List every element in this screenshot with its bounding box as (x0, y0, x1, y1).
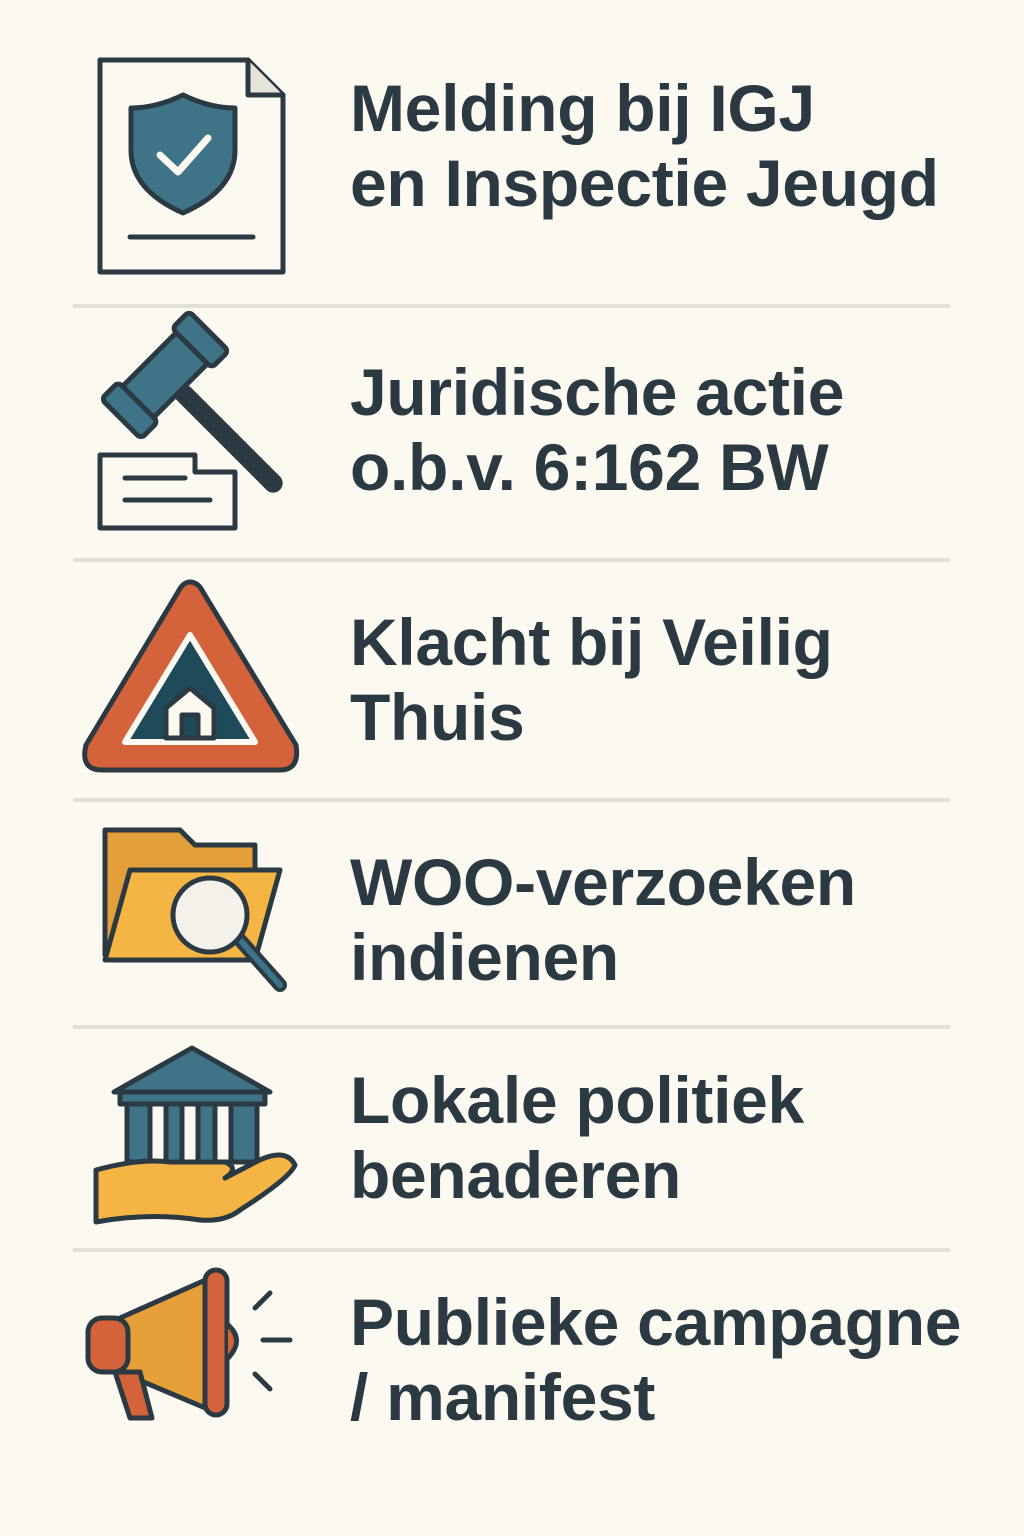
icon: document with shield (100, 60, 283, 272)
icon: megaphone (88, 1270, 290, 1418)
text: klacht: Thuis (350, 680, 524, 754)
text: publieke campagne (350, 1285, 961, 1434)
text: juridische actie (350, 355, 844, 504)
icon: warning triangle with house (85, 582, 297, 770)
text: woo: WOO-verzoeken (350, 845, 856, 919)
text: lokale politiek: benaderen (350, 1138, 681, 1212)
text: woo: indienen (350, 920, 619, 994)
text: melding (350, 71, 939, 220)
text: lokale politiek (350, 1063, 804, 1212)
text: publieke campagne: Publieke campagne (350, 1285, 961, 1359)
text: publieke campagne: / manifest (350, 1360, 655, 1434)
icon: gavel (100, 311, 322, 532)
icon: folder with magnifier (105, 830, 280, 985)
text: melding: Melding bij IGJ (350, 71, 815, 145)
text: lokale politiek: Lokale politiek (350, 1063, 804, 1137)
icon: hand holding building (96, 1048, 295, 1222)
text: melding: en Inspectie Jeugd (350, 146, 939, 220)
text: klacht: Klacht bij Veilig (350, 605, 833, 679)
text: juridische actie: o.b.v. 6:162 BW (350, 430, 828, 504)
text: woo (350, 845, 856, 994)
text: juridische actie: Juridische actie (350, 355, 844, 429)
text: klacht (350, 605, 833, 754)
